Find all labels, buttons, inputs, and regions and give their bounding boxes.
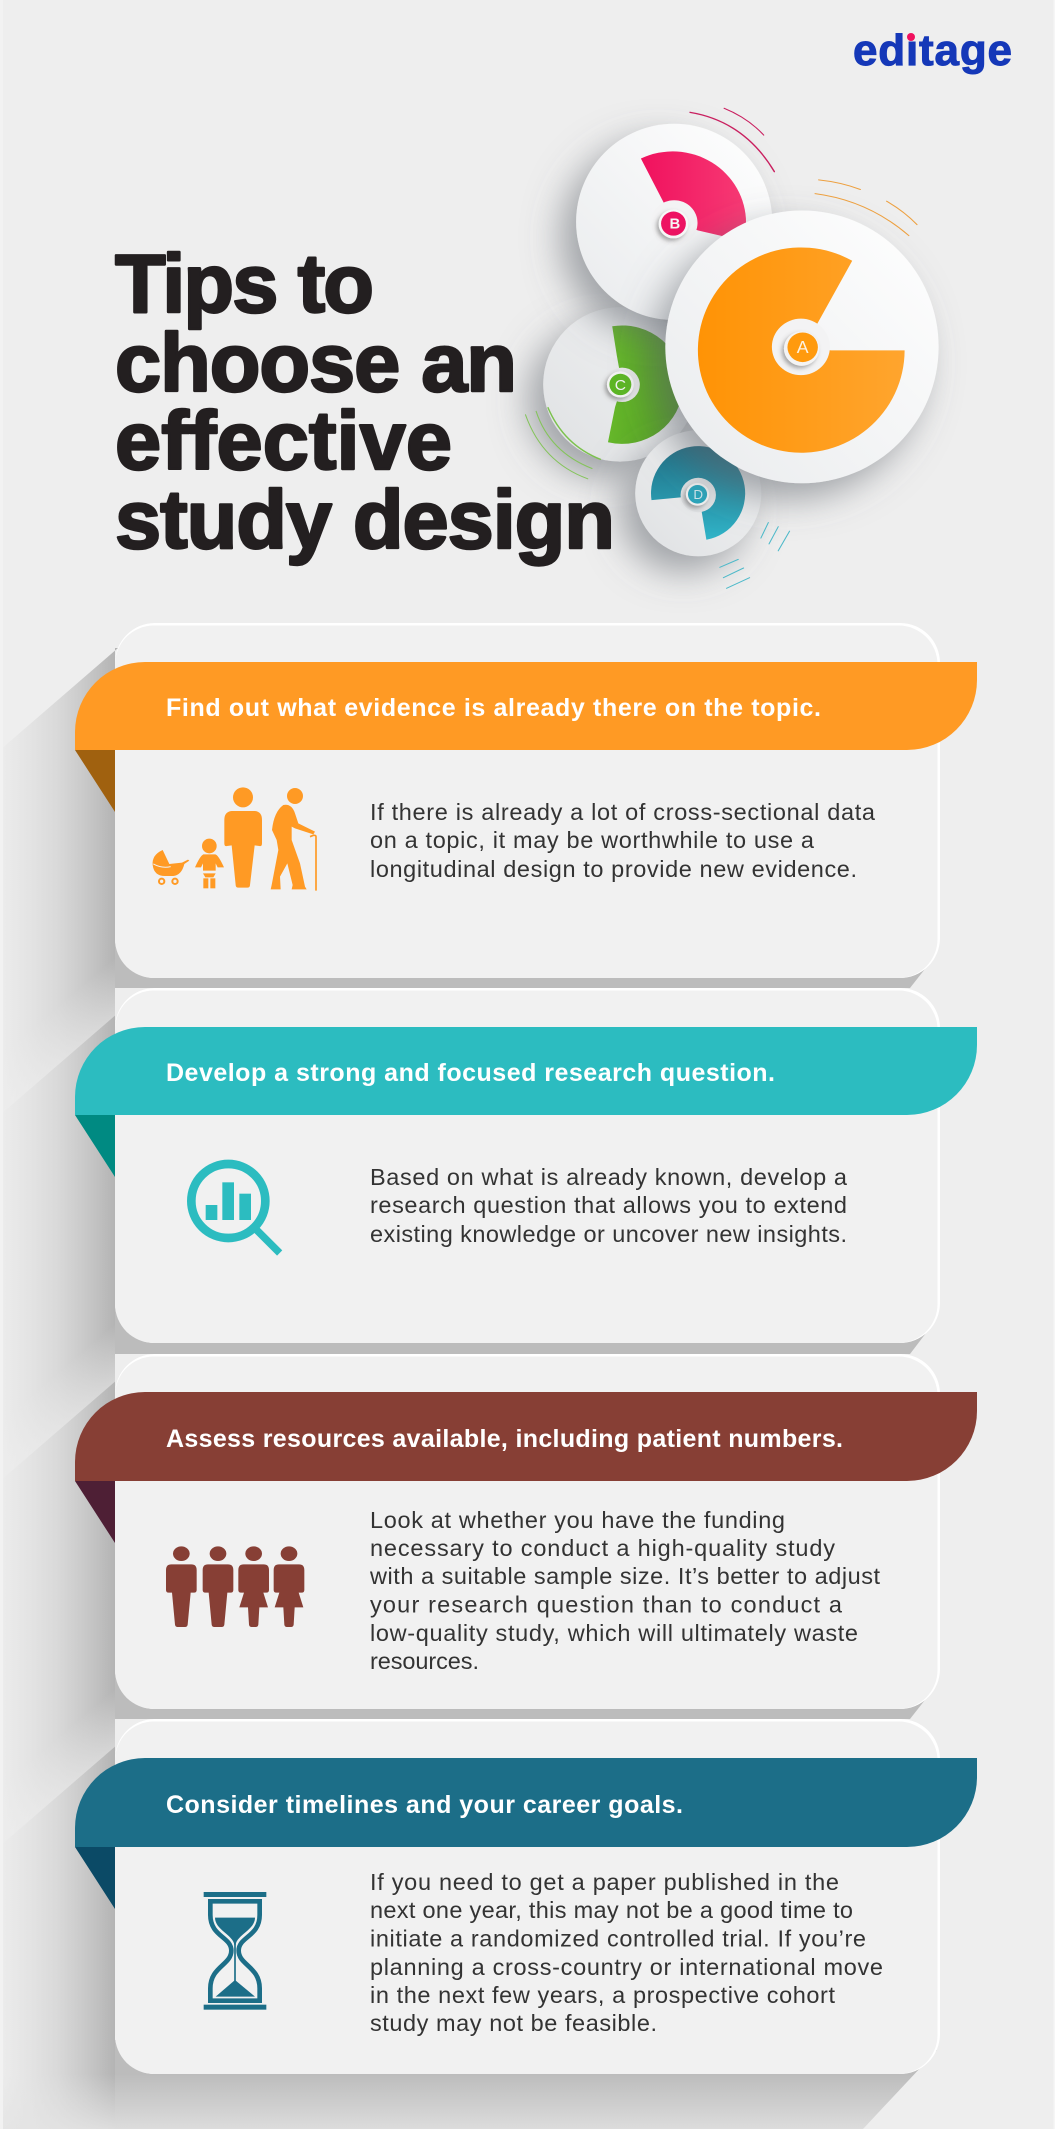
disc C: C (615, 377, 626, 394)
disc B (576, 124, 772, 320)
ribbon heading: Consider timelines and your career goals. (166, 1791, 683, 1819)
title: study design (115, 473, 615, 566)
body text: necessary to conduct a high-quality study (370, 1535, 835, 1561)
body text: study may not be feasible. (370, 2010, 657, 2036)
icon: magnifier with bars (191, 1164, 280, 1253)
body text (369, 1507, 880, 1674)
ribbon heading (75, 1027, 977, 1177)
panel: assess resources (0, 1322, 977, 1719)
body text (370, 1164, 848, 1247)
body text (370, 799, 876, 882)
body text (370, 1869, 883, 2036)
body text: on a topic, it may be worthwhile to use a (370, 827, 815, 853)
body text: next one year, this may not be a good time to (370, 1897, 853, 1923)
body text: If you need to get a paper published in the (370, 1869, 839, 1895)
motion arcs (525, 108, 917, 588)
ribbon heading: Develop a strong and focused research question. (166, 1059, 775, 1087)
ribbon heading (75, 1392, 977, 1543)
ribbon heading: Find out what evidence is already there on the topic. (166, 694, 821, 722)
ribbon heading (75, 1758, 977, 1909)
body text: research question that allows you to extend (370, 1192, 847, 1218)
title: Tips to (115, 237, 374, 330)
body text: initiate a randomized controlled trial. If you’re (370, 1926, 866, 1952)
disc A: A (797, 337, 809, 357)
body text: low-quality study, which will ultimately waste (370, 1620, 858, 1646)
body text: your research question than to conduct a (370, 1592, 843, 1618)
disc A (665, 211, 939, 483)
body text: planning a cross-country or international move (370, 1954, 883, 1980)
long shadow behind cards (0, 648, 118, 2129)
title: choose an (115, 316, 517, 409)
panel: find out evidence (75, 623, 977, 988)
disc D (635, 430, 761, 556)
title: effective (115, 394, 452, 487)
body text: If there is already a lot of cross-sectional data (370, 799, 876, 825)
panel: research question (0, 956, 977, 1354)
ribbon heading (75, 662, 977, 812)
disc C (543, 307, 697, 462)
title (115, 237, 615, 566)
body text: Based on what is already known, develop a (370, 1164, 848, 1190)
body text: longitudinal design to provide new evidence. (370, 856, 857, 882)
icon: four people (166, 1546, 304, 1627)
body text: in the next few years, a prospective cohort (370, 1982, 835, 2008)
logo: editage: editage (853, 26, 1012, 75)
disc D: D (693, 487, 703, 502)
body text: with a suitable sample size. It’s better to adjust (369, 1563, 880, 1589)
illustration: pie discs A B C D (525, 108, 939, 588)
icon: hourglass (204, 1892, 266, 2010)
body text: resources. (370, 1648, 479, 1674)
ribbon heading: Assess resources available, including patient numbers. (166, 1425, 843, 1453)
disc B: B (670, 217, 680, 232)
body text: existing knowledge or uncover new insights. (370, 1221, 847, 1247)
panel: timelines and career goals (0, 1687, 977, 2129)
icon: generations of people (153, 787, 316, 891)
body text: Look at whether you have the funding (370, 1507, 785, 1533)
